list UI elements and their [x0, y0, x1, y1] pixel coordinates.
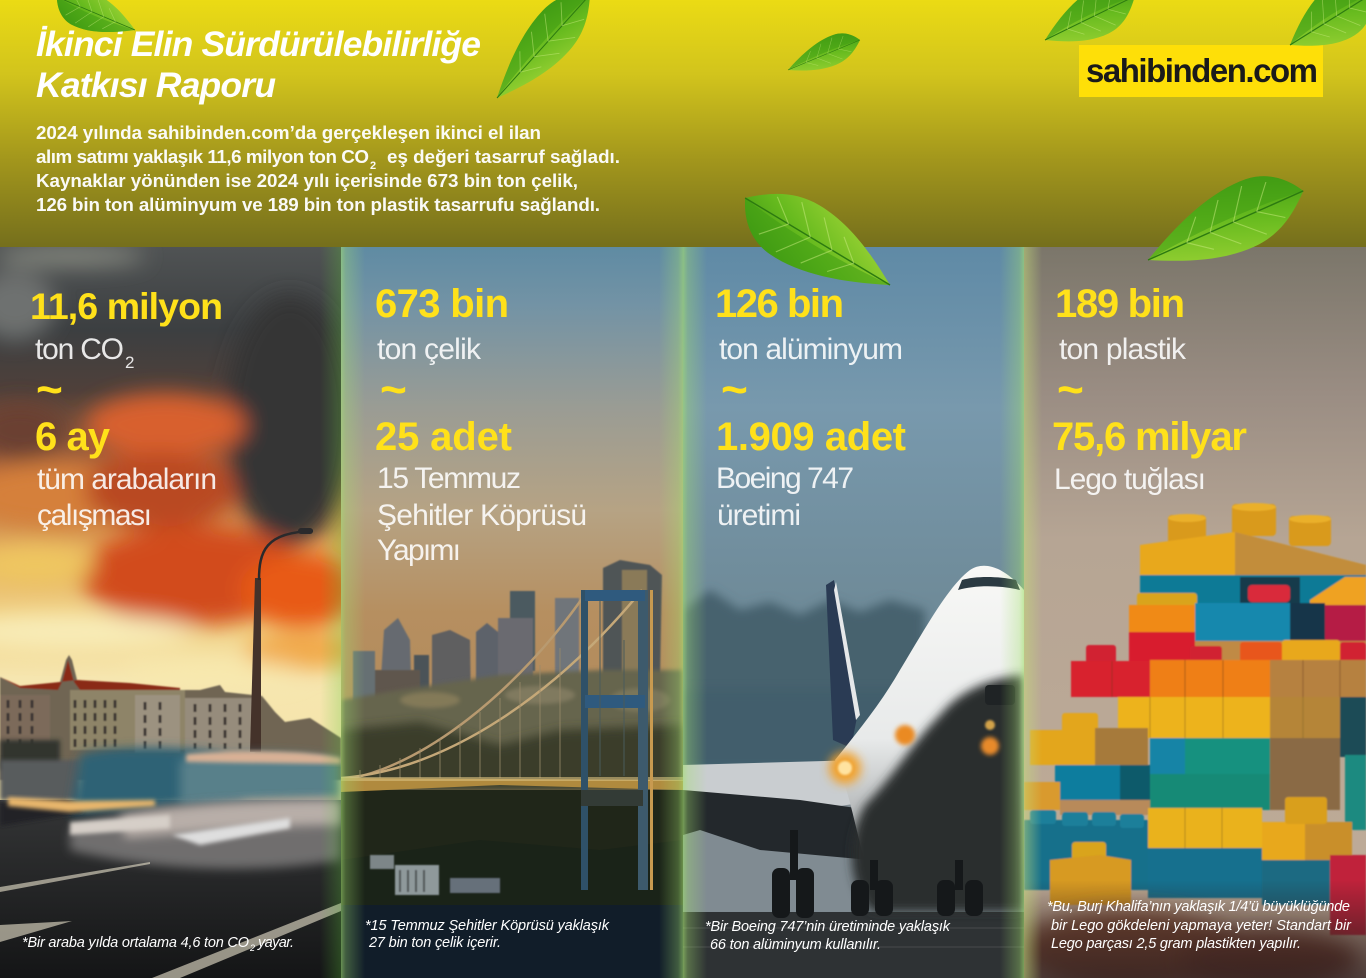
stat: 673 bin ton çelik: [376, 288, 507, 394]
stat: 126 bin ton alüminyum: ~: [721, 363, 748, 415]
stat: 673 bin ton çelik: 673 bin: [375, 282, 509, 326]
equivalence: 25 adet: Şehitler Köprüsü: [377, 499, 587, 532]
equivalence: 25 adet: [375, 415, 587, 567]
equivalence: 75,6 milyar: 75,6 milyar: [1052, 415, 1247, 459]
footnote: *Bir Boeing 747’nin üretiminde yaklaşık: [705, 919, 951, 935]
shore buildings: [370, 855, 500, 895]
stat: 189 bin ton plastik: ton plastik: [1059, 333, 1187, 366]
blue lower rows: [1148, 848, 1262, 898]
footnote: Lego parçası 2,5 gram plastikten yapılır.: [1051, 936, 1301, 952]
runway: [685, 804, 1004, 912]
equivalence: 6 ay: 6 ay: [35, 415, 111, 459]
engine glows: [829, 720, 999, 784]
far wing: [683, 760, 850, 806]
blurred foreground: [1020, 247, 1366, 978]
buildings: [0, 655, 341, 780]
fuselage: [835, 566, 1024, 844]
small yellow brick: [1072, 842, 1106, 862]
photo: sunset street with moving car: [0, 246, 365, 978]
bridge: [341, 590, 683, 890]
icon: leaf above logo left: [1034, 0, 1145, 60]
intro paragraph: [36, 122, 620, 215]
stat: 126 bin ton alüminyum: 126 bin: [715, 282, 844, 326]
stat: 11,6 milyon ton CO2: ~: [36, 363, 63, 415]
lane markings: [0, 862, 341, 978]
landing gear: [772, 830, 983, 918]
intro paragraph: 2: [370, 160, 376, 172]
icon: large leaf over panel 4: [1134, 159, 1316, 288]
hillside and trees: [341, 670, 683, 790]
yellow lower row: [1148, 808, 1262, 850]
equivalence: 1.909 adet: üretimi: [717, 499, 801, 532]
yellow row: [1118, 697, 1270, 738]
red bricks: [1330, 855, 1366, 935]
photo: stacked Lego bricks: [1024, 503, 1366, 935]
equivalence: 1.909 adet: Boeing 747: [716, 462, 854, 495]
intro paragraph: 2024 yılında sahibinden.com’da gerçekleşen ikinci el ilan: [36, 122, 541, 143]
water: [341, 905, 683, 978]
panel: CO2 / cars: [0, 246, 365, 978]
stat: 673 bin ton çelik: ~: [380, 363, 407, 415]
report title: İkinci Elin Sürdürülebilirliğe: [36, 24, 481, 64]
sahibinden.com logo: sahibinden.com: [1086, 52, 1318, 89]
stat: 11,6 milyon ton CO2: ton CO: [35, 333, 124, 366]
footnote: 66 ton alüminyum kullanılır.: [710, 937, 881, 953]
stat: 126 bin ton alüminyum: [718, 288, 901, 394]
equivalence: 1.909 adet: 1.909 adet: [716, 415, 906, 459]
equivalence: 6 ay: [35, 415, 217, 532]
dark shore: [341, 840, 683, 905]
equivalence: 25 adet: Yapımı: [377, 534, 461, 567]
icon: small leaf centre: [782, 26, 865, 83]
equivalence: 25 adet: 25 adet: [375, 415, 512, 459]
equivalence: 75,6 milyar: [1052, 415, 1247, 496]
report title: [36, 24, 481, 105]
stat: 189 bin ton plastik: 189 bin: [1055, 282, 1185, 326]
panel glow: [683, 247, 1024, 978]
equivalence: 1.909 adet: [718, 421, 906, 526]
teal rows: [1150, 738, 1185, 774]
panel: steel / bridge: [341, 247, 683, 978]
intro paragraph: eş değeri tasarruf sağladı.: [387, 146, 620, 167]
intro paragraph: Kaynaklar yönünden ise 2024 yılı içerisinde 673 bin ton çelik,: [36, 170, 578, 191]
orange / red row: [1071, 661, 1150, 697]
header band: [0, 0, 1366, 247]
icon: large leaf over panel 2/3: [727, 171, 906, 316]
dark underbelly: [852, 675, 1024, 912]
photo: Istanbul bridge and skyline: [341, 247, 683, 978]
cockpit windows: [958, 577, 1020, 590]
footnote: 2: [249, 943, 255, 953]
footnote: 27 bin ton çelik içerir.: [368, 935, 501, 951]
studs top: [1168, 503, 1331, 546]
left yellow brick: [1062, 713, 1098, 733]
icon: leaf above logo right: [1275, 0, 1366, 67]
sahibinden.com logo: [1079, 45, 1323, 97]
intro paragraph: alım satımı yaklaşık 11,6 milyon ton CO: [36, 146, 369, 167]
street lamp: [250, 528, 313, 752]
stat: 673 bin ton çelik: ton çelik: [377, 333, 482, 366]
skyline: [353, 560, 662, 711]
stat: 189 bin ton plastik: ~: [1057, 363, 1084, 415]
footnote: [1047, 899, 1352, 952]
forest: [683, 590, 925, 770]
equivalence: 6 ay: tüm arabaların: [37, 463, 217, 496]
stat: 11,6 milyon ton CO2: [32, 292, 221, 394]
footnote: [705, 919, 951, 953]
footnote: [365, 918, 610, 951]
stat: 11,6 milyon ton CO2: 2: [125, 353, 134, 372]
upper yellow and blue rows: [1140, 532, 1366, 578]
intro paragraph: 126 bin ton alüminyum ve 189 bin ton plastik tasarrufu sağlandı.: [36, 194, 600, 215]
equivalence: 6 ay: çalışması: [37, 499, 152, 532]
stat: 11,6 milyon ton CO2: 11,6 milyon: [30, 285, 223, 327]
road: [0, 800, 341, 978]
icon: leaf beside title: [479, 0, 606, 113]
footnote: yayar.: [257, 935, 294, 951]
blurred car: [0, 748, 341, 869]
panel: aluminium / plane: [683, 247, 1024, 978]
middle row: [1129, 605, 1195, 637]
photo: Boeing 747 taking off: [683, 247, 1024, 978]
panel glow: [341, 247, 683, 978]
stat: 189 bin ton plastik: [1055, 282, 1187, 415]
report title: Katkısı Raporu: [36, 65, 276, 105]
footnote: *Bir araba yılda ortalama 4,6 ton CO: [22, 935, 249, 951]
footnote: *Bu, Burj Khalifa’nın yaklaşık 1/4’ü büyüklüğünde: [1047, 899, 1350, 915]
stat: 126 bin ton alüminyum: ton alüminyum: [719, 333, 903, 366]
footnote: bir Lego gökdeleni yapmaya yeter! Standart bir: [1051, 918, 1352, 934]
tail fin: [826, 580, 858, 748]
equivalence: 75,6 milyar: Lego tuğlası: [1054, 463, 1206, 496]
footnote: *15 Temmuz Şehitler Köprüsü yaklaşık: [365, 918, 610, 934]
icon: leaf top left: [49, 0, 142, 48]
panel: plastic / Lego: [1020, 247, 1366, 978]
equivalence: 25 adet: 15 Temmuz: [377, 462, 521, 495]
studs row: [1086, 640, 1366, 663]
